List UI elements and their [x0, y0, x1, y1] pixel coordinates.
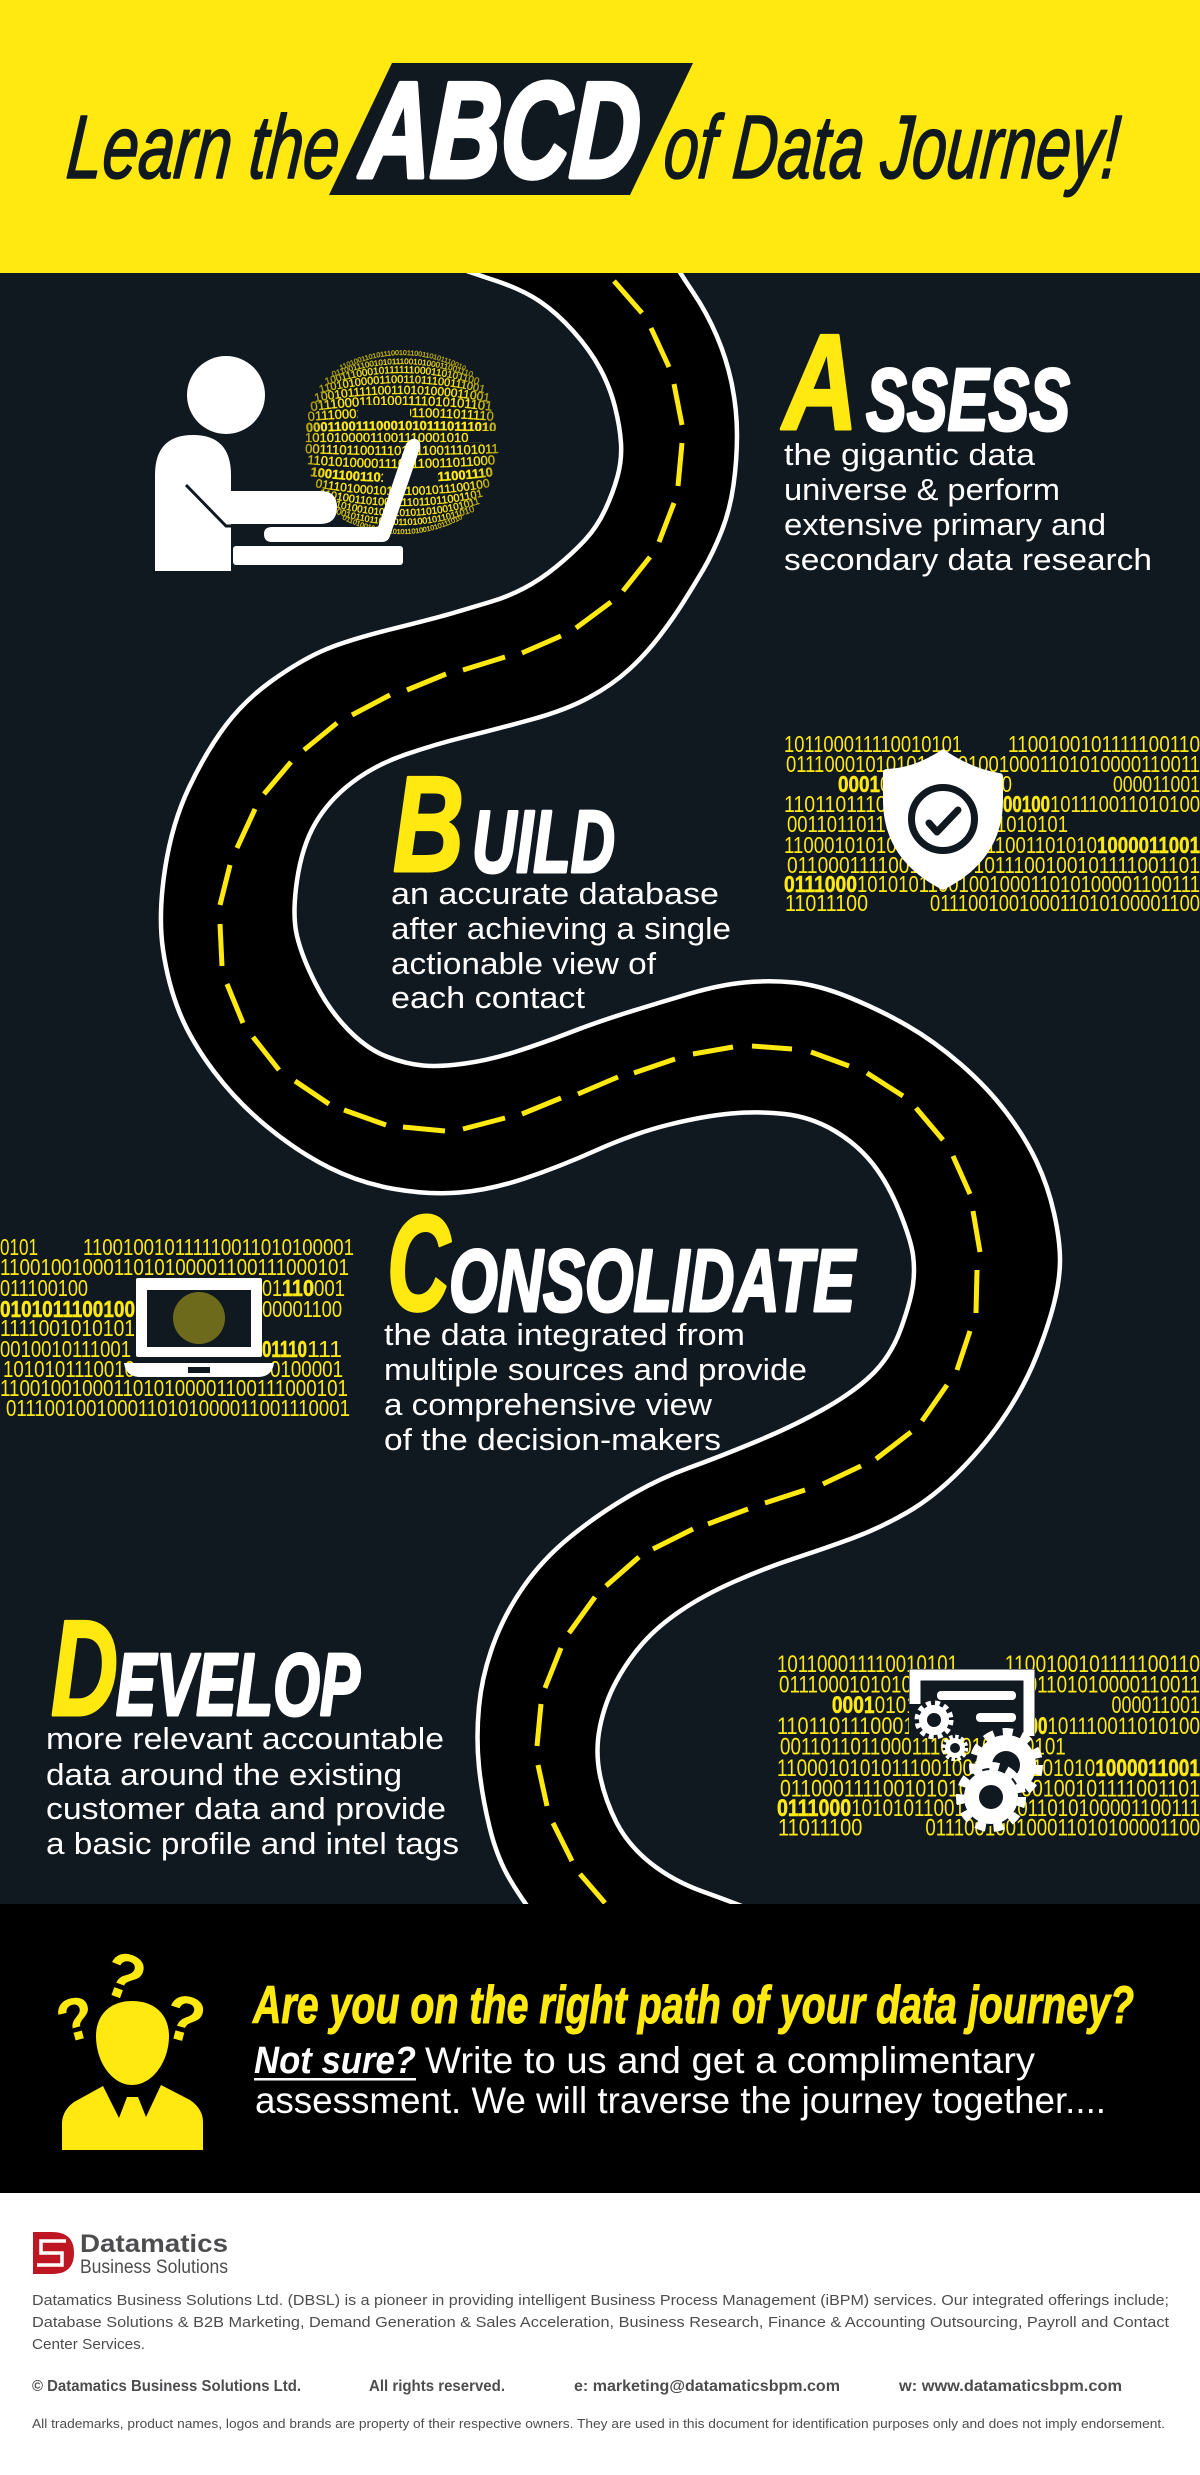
binary pattern: consolidate: 01 — [262, 1275, 282, 1301]
binary pattern: consolidate: 1111001010101 — [0, 1315, 135, 1341]
binary pattern: develop: 0111000 — [777, 1795, 851, 1821]
heading: develop: D — [51, 1592, 118, 1744]
text: contact line: © Datamatics Business Solutions Ltd. — [32, 2378, 301, 2395]
binary pattern: build: 0101011100010 — [880, 771, 1012, 797]
text: contact line: e: marketing@datamaticsbpm.com — [574, 2378, 840, 2395]
binary pattern: develop — [777, 1651, 1200, 1841]
binary globe — [306, 350, 498, 534]
binary pattern: develop: 1100010101011100100111001101010 — [777, 1755, 1095, 1781]
text: develop description — [46, 1721, 459, 1861]
text: develop description: customer data and provide — [46, 1791, 446, 1826]
text: assess description: secondary data research — [784, 542, 1152, 577]
text: call to action message: Write to us and get a complimentary — [425, 2040, 1036, 2081]
binary pattern: consolidate: 0111001001000110101000011001110001 — [6, 1395, 350, 1421]
title: Learn the — [63, 97, 344, 198]
binary pattern: build: 101100011110010101 — [784, 731, 962, 757]
text: company description: Center Services. — [32, 2336, 145, 2353]
binary pattern: develop: 0011011011000111010101010101 — [780, 1733, 1066, 1759]
text: consolidate description: multiple sources and provide — [384, 1352, 807, 1387]
binary pattern: build: 0111000 — [784, 871, 857, 897]
binary pattern: develop: 0101011100010 — [875, 1692, 1009, 1718]
binary pattern: consolidate: 0101 — [0, 1234, 38, 1260]
text: call to action message — [254, 2040, 1106, 2121]
icon: confused person — [49, 1936, 213, 2150]
text: call to action message: Not sure? — [254, 2040, 416, 2082]
text: develop description: a basic profile and intel tags — [46, 1826, 459, 1861]
binary pattern: consolidate: 111 — [307, 1336, 342, 1362]
binary pattern: consolidate: 01110 — [262, 1336, 307, 1362]
icon: confused person: ? — [49, 1982, 102, 2056]
binary pattern: consolidate: 001 — [314, 1275, 345, 1301]
text: assess description: universe & perform — [784, 472, 1060, 507]
text: trademark notice: All trademarks, product names, logos and brands are property of their respective owners. They are used in this document for identification purposes only and does not imply endorsement. — [32, 2416, 1165, 2431]
binary pattern: build: 0001 — [838, 771, 880, 797]
title highlight block — [329, 63, 693, 195]
binary pattern: consolidate: 00001100 — [262, 1296, 342, 1322]
heading: consolidate: C — [387, 1187, 451, 1339]
heading: build: B — [393, 748, 464, 900]
text: company description: Database Solutions & B2B Marketing, Demand Generation & Sales Acceleration, Business Research, Finance & Accounting Outsourcing, Payroll and Contact — [32, 2314, 1170, 2331]
binary pattern: consolidate: 0101011100100 — [0, 1296, 135, 1322]
text: contact line — [32, 2378, 1122, 2395]
binary pattern: develop: 110110111000101011100 — [777, 1713, 1000, 1739]
icon: document with gears — [909, 1669, 1039, 1828]
icon: confused person: ? — [156, 1979, 213, 2059]
heading: develop — [51, 1592, 360, 1744]
binary pattern: build: 110110111000101011100 — [784, 791, 1003, 817]
binary pattern: build — [784, 731, 1200, 916]
heading: develop: EVELOP — [116, 1635, 360, 1734]
panel: call to action — [0, 1904, 1200, 2193]
binary pattern: build: 0011011011000111010101010101 — [787, 811, 1068, 837]
text: assess description: the gigantic data — [784, 437, 1036, 472]
text: assess description: extensive primary and — [784, 507, 1106, 542]
binary globe: 0110100101011101011010010101110101101001010111010110100 — [342, 514, 462, 534]
text: build description: an accurate database — [391, 876, 719, 911]
binary pattern: develop: 0001 — [832, 1692, 875, 1718]
heading: build: UILD — [472, 792, 615, 891]
icon: person at laptop with binary globe — [155, 350, 498, 571]
text: call to action message: assessment. We will traverse the journey together.... — [255, 2080, 1106, 2121]
text: assess description — [784, 437, 1152, 577]
title: ABCD — [356, 54, 644, 206]
binary pattern: develop: 00100 — [1000, 1713, 1047, 1739]
header band — [0, 0, 1200, 273]
binary globe: 110100110101110010110011010111001011001101011100101100110 — [340, 350, 466, 370]
binary pattern: build: 00100 — [1003, 791, 1050, 817]
binary pattern: consolidate: 110010010111110011010100001 — [83, 1234, 354, 1260]
text: company description — [32, 2292, 1170, 2353]
binary globe: 01101001010111010110100101011101011010010101110101 — [336, 498, 480, 516]
road — [161, 240, 1060, 1930]
binary pattern: build: 1100010101011100100111001101010 — [784, 832, 1097, 858]
binary pattern: develop: 101100011110010101 — [777, 1651, 958, 1677]
binary pattern: consolidate: 011100100 — [0, 1275, 88, 1301]
binary pattern: consolidate: 1010101110010 — [3, 1356, 135, 1382]
binary globe: 011101000101011001011100100111010001010110010111001001 — [316, 478, 490, 496]
person figure — [155, 356, 420, 571]
section: consolidate — [384, 1187, 857, 1457]
panel: footer — [0, 2193, 1200, 2475]
text: develop description: more relevant accountable — [46, 1721, 444, 1756]
binary pattern: consolidate: 1100100100011010100001100111000101 — [0, 1254, 349, 1280]
logo: Datamatics — [33, 2230, 228, 2278]
section: build — [391, 748, 731, 1015]
binary globe: 110100110100011101101100110100110100011101101100110 — [321, 489, 483, 506]
text: contact line: w: www.datamaticsbpm.com — [898, 2378, 1122, 2395]
text: develop description: data around the existing — [46, 1757, 402, 1792]
icon: confused person: ? — [94, 1936, 155, 2017]
binary pattern: consolidate: 0010010111001 — [0, 1336, 131, 1362]
heading: assess: A — [781, 306, 858, 458]
text: consolidate description: of the decision-makers — [384, 1422, 721, 1457]
binary globe: 1001011011010011010010110110100110100101101101001 — [336, 506, 474, 526]
title — [63, 54, 1124, 206]
dark background panel — [0, 272, 1200, 1906]
text: build description: actionable view of — [391, 946, 656, 981]
binary pattern: build: 11011100 — [785, 890, 868, 916]
logo: Datamatics: Datamatics — [80, 2230, 228, 2258]
text: consolidate description — [384, 1317, 807, 1457]
binary globe: 0110011100101011100101000110011100101011100101000110011 — [332, 358, 474, 377]
heading: build — [393, 748, 615, 900]
binary pattern: consolidate — [0, 1234, 354, 1421]
text: company description: Datamatics Business Solutions Ltd. (DBSL) is a pioneer in providing intelligent Business Process Management (iBPM) services. Our integrated offerings include; — [32, 2292, 1169, 2309]
heading: assess: SSESS — [866, 350, 1070, 449]
text: contact line: All rights reserved. — [369, 2378, 505, 2395]
logo: Datamatics: Business Solutions — [80, 2257, 228, 2278]
binary pattern: consolidate: 110 — [282, 1275, 314, 1301]
icon: laptop — [124, 1278, 274, 1377]
icon: security shield — [883, 749, 1003, 890]
binary pattern: consolidate: 0100001 — [270, 1356, 343, 1382]
section: develop — [46, 1592, 459, 1861]
text: build description: each contact — [391, 980, 585, 1015]
binary globe: 110101000011001101110011100111010100001100110111001 — [319, 375, 484, 394]
text: build description: after achieving a single — [391, 911, 731, 946]
text: consolidate description: a comprehensive view — [384, 1387, 713, 1422]
heading: consolidate — [387, 1187, 857, 1339]
section: assess — [781, 306, 1152, 577]
binary pattern: consolidate: 1100100100011010100001100111000101 — [0, 1375, 348, 1401]
binary globe: 1001110001011111100011010110011100010111111000110101 — [325, 366, 480, 385]
text: consolidate description: the data integrated from — [384, 1317, 745, 1352]
heading: consolidate: ONSOLIDATE — [449, 1231, 857, 1330]
binary pattern: develop: 11011100 — [778, 1815, 862, 1841]
heading: assess — [781, 306, 1070, 458]
text: build description — [391, 876, 731, 1015]
